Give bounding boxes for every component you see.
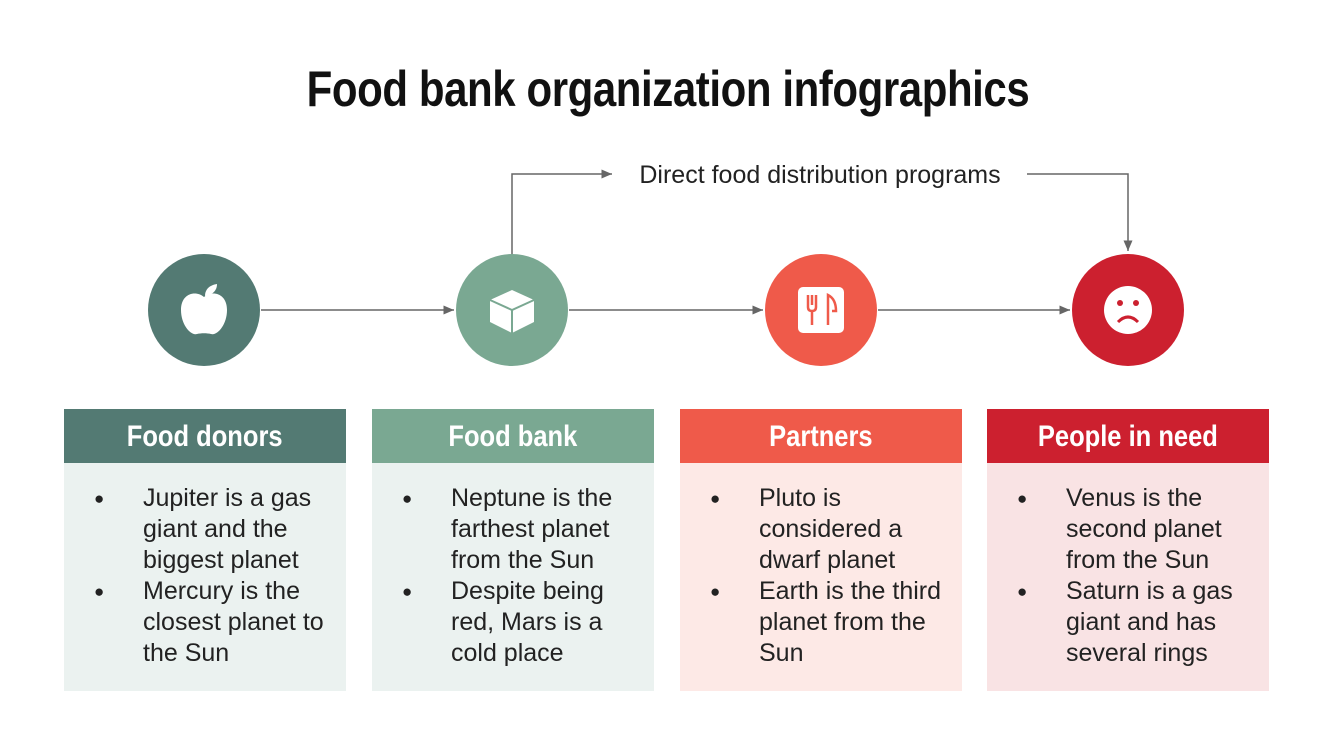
panel: people in need <box>987 409 1269 691</box>
panel: partners: Pluto is considered a dwarf planet <box>759 484 902 574</box>
arrows <box>261 174 1128 310</box>
panel: people in need: Saturn is a gas giant and has several rings <box>1066 577 1233 667</box>
panel: food donors <box>64 409 346 691</box>
panel: food bank: Neptune is the farthest planet from the Sun <box>451 484 612 574</box>
panel: food bank: Despite being red, Mars is a cold place <box>451 577 604 667</box>
panel: food bank <box>372 409 654 691</box>
icon: apple <box>148 254 260 366</box>
panel: people in need: Venus is the second planet from the Sun <box>1066 484 1222 574</box>
panel: people in need: People in need <box>1038 420 1218 453</box>
panel: food bank: Food bank <box>449 420 577 453</box>
panel: partners <box>680 409 962 691</box>
icon: cutlery <box>765 254 877 366</box>
title: Food bank organization infographics <box>307 61 1029 117</box>
panel: food donors: Jupiter is a gas giant and the biggest planet <box>143 484 311 574</box>
panel: food donors: Food donors <box>127 420 283 453</box>
panel: partners: Partners <box>769 420 873 453</box>
label: direct distribution: Direct food distribution programs <box>639 161 1001 189</box>
panel: food donors: Mercury is the closest planet to the Sun <box>143 577 324 667</box>
icon: box <box>456 254 568 366</box>
panel: partners: Earth is the third planet from the Sun <box>759 577 941 667</box>
icon: sad face <box>1072 254 1184 366</box>
